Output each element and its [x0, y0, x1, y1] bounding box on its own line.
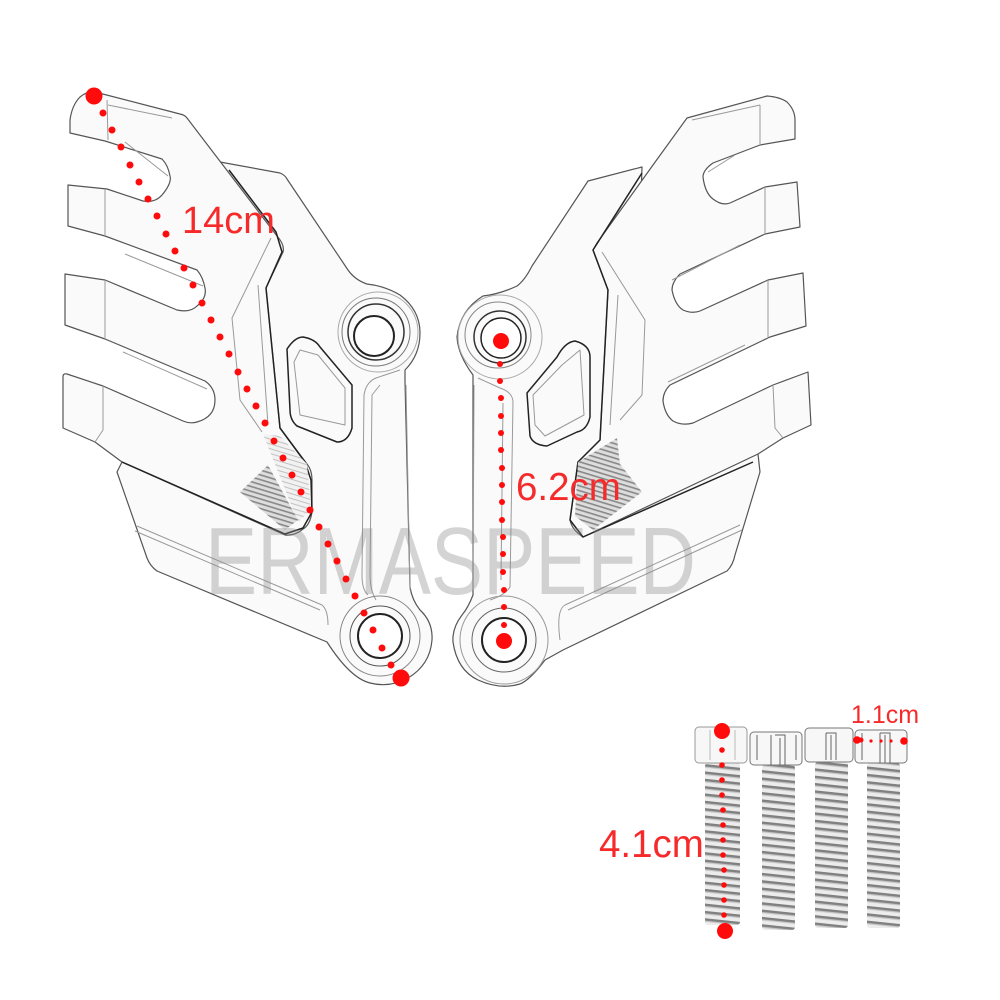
left arm lines [362, 370, 410, 600]
bolt 3 [805, 728, 853, 928]
bracket: right [453, 96, 811, 686]
left prong detail lines [95, 100, 207, 442]
right front plate with four prongs [570, 96, 811, 537]
right arm lines [473, 378, 513, 600]
left window inner [294, 350, 345, 425]
left hatched panel [240, 465, 298, 530]
bolts [695, 727, 907, 930]
right inner groove [570, 173, 753, 537]
right lower boss [460, 596, 548, 684]
bolt 4 [855, 730, 907, 928]
left rear plate [117, 162, 432, 685]
left front plate with four prongs [63, 92, 312, 535]
right window inner [533, 350, 584, 436]
bracket: left [63, 92, 432, 685]
dotted measure line: 1.1cm [853, 736, 908, 745]
right upper boss [458, 295, 542, 379]
left inner groove [122, 170, 312, 534]
label: 6.2cm: 6.2cm [516, 466, 621, 509]
left lower rib [135, 526, 328, 625]
right groove secondary line [602, 252, 645, 425]
dotted measure line: 4.1cm [714, 723, 733, 939]
right lower rib [559, 525, 742, 640]
right hatched ridge [575, 438, 642, 530]
left hatched ridge [263, 434, 311, 522]
right window hole [527, 341, 590, 446]
left upper boss [338, 292, 418, 372]
right rear plate [453, 167, 760, 686]
left window hole [287, 337, 352, 442]
left lower boss [340, 596, 420, 676]
watermark: ERMASPEED [205, 508, 696, 615]
dotted measure line: 14cm [86, 88, 410, 686]
right prong detail lines [668, 105, 783, 438]
label: 1.1cm: 1.1cm [851, 701, 919, 729]
label: 4.1cm: 4.1cm [599, 823, 704, 866]
bolt 2 [750, 732, 802, 930]
label: 14cm: 14cm [182, 200, 275, 242]
dotted measure line: 6.2cm [493, 333, 512, 649]
left groove secondary line [232, 238, 271, 432]
bolt 1 [695, 727, 747, 925]
